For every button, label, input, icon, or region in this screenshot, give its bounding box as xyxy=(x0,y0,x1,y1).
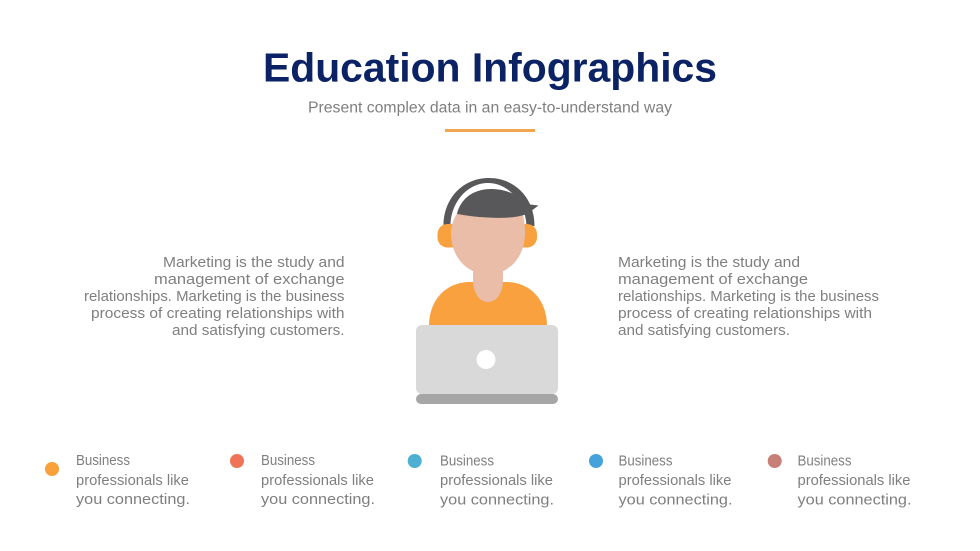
icon: orange dot xyxy=(45,462,59,476)
icon: laptop body xyxy=(416,325,558,394)
icon: shirt xyxy=(429,282,547,326)
legend text 1: Business xyxy=(76,452,130,469)
legend item 5 xyxy=(768,452,912,508)
icon: dusty rose dot xyxy=(768,454,782,468)
icon: headband xyxy=(444,178,534,226)
legend item 3 xyxy=(408,452,554,508)
legend text 5: professionals like xyxy=(798,472,910,489)
text block: left description: relationships. Marketing is the business xyxy=(84,288,345,305)
legend text 5: you connecting. xyxy=(798,492,912,508)
title underline xyxy=(445,129,535,132)
icon: right ear cup xyxy=(513,224,537,248)
legend text 2 xyxy=(261,452,375,508)
text block: left description xyxy=(84,254,345,339)
legend item 1 xyxy=(45,452,190,508)
text block: right description: Marketing is the study and xyxy=(618,254,800,271)
text block: right description xyxy=(618,254,879,339)
icon: laptop base xyxy=(416,394,558,404)
legend text 3: professionals like xyxy=(440,472,553,489)
icon: coral dot xyxy=(230,454,244,468)
icon: left ear cup xyxy=(438,224,462,248)
legend text 1: professionals like xyxy=(76,472,189,489)
legend text 4: Business xyxy=(618,452,673,470)
legend text 2: Business xyxy=(261,452,315,469)
legend text 1: you connecting. xyxy=(76,491,190,508)
legend text 4: professionals like xyxy=(618,472,732,489)
subtitle: Present complex data in an easy-to-understand way xyxy=(308,100,672,116)
icon: neck xyxy=(473,262,503,302)
legend text 5 xyxy=(798,452,912,508)
legend text 3 xyxy=(440,452,554,508)
text block: right description: relationships. Marketing is the business xyxy=(618,288,879,305)
text block: left description: and satisfying customers. xyxy=(172,322,344,339)
legend item 2 xyxy=(230,452,375,508)
title: Education Infographics xyxy=(263,44,717,90)
icon: blue dot xyxy=(589,454,603,468)
legend text 1 xyxy=(76,452,190,508)
legend text 5: Business xyxy=(798,452,852,470)
legend item 4 xyxy=(589,452,732,508)
text block: left description: Marketing is the study and xyxy=(163,254,344,271)
icon: teal dot xyxy=(408,454,422,468)
legend text 4 xyxy=(618,452,732,508)
icon: laptop logo xyxy=(476,350,496,369)
text block: right description: management of exchange xyxy=(618,271,808,288)
text block: right description: process of creating relationships with xyxy=(618,305,872,322)
illustration: person with headphones and laptop xyxy=(416,178,558,404)
text block: left description: process of creating relationships with xyxy=(91,305,344,322)
legend text 3: Business xyxy=(440,452,494,470)
text block: right description: and satisfying customers. xyxy=(618,322,790,339)
legend text 2: you connecting. xyxy=(261,491,375,508)
icon: hair xyxy=(457,189,538,218)
icon: face xyxy=(451,212,525,274)
legend text 3: you connecting. xyxy=(440,492,554,508)
text block: left description: management of exchange xyxy=(154,271,344,288)
legend text 4: you connecting. xyxy=(618,492,732,508)
legend text 2: professionals like xyxy=(261,472,374,489)
